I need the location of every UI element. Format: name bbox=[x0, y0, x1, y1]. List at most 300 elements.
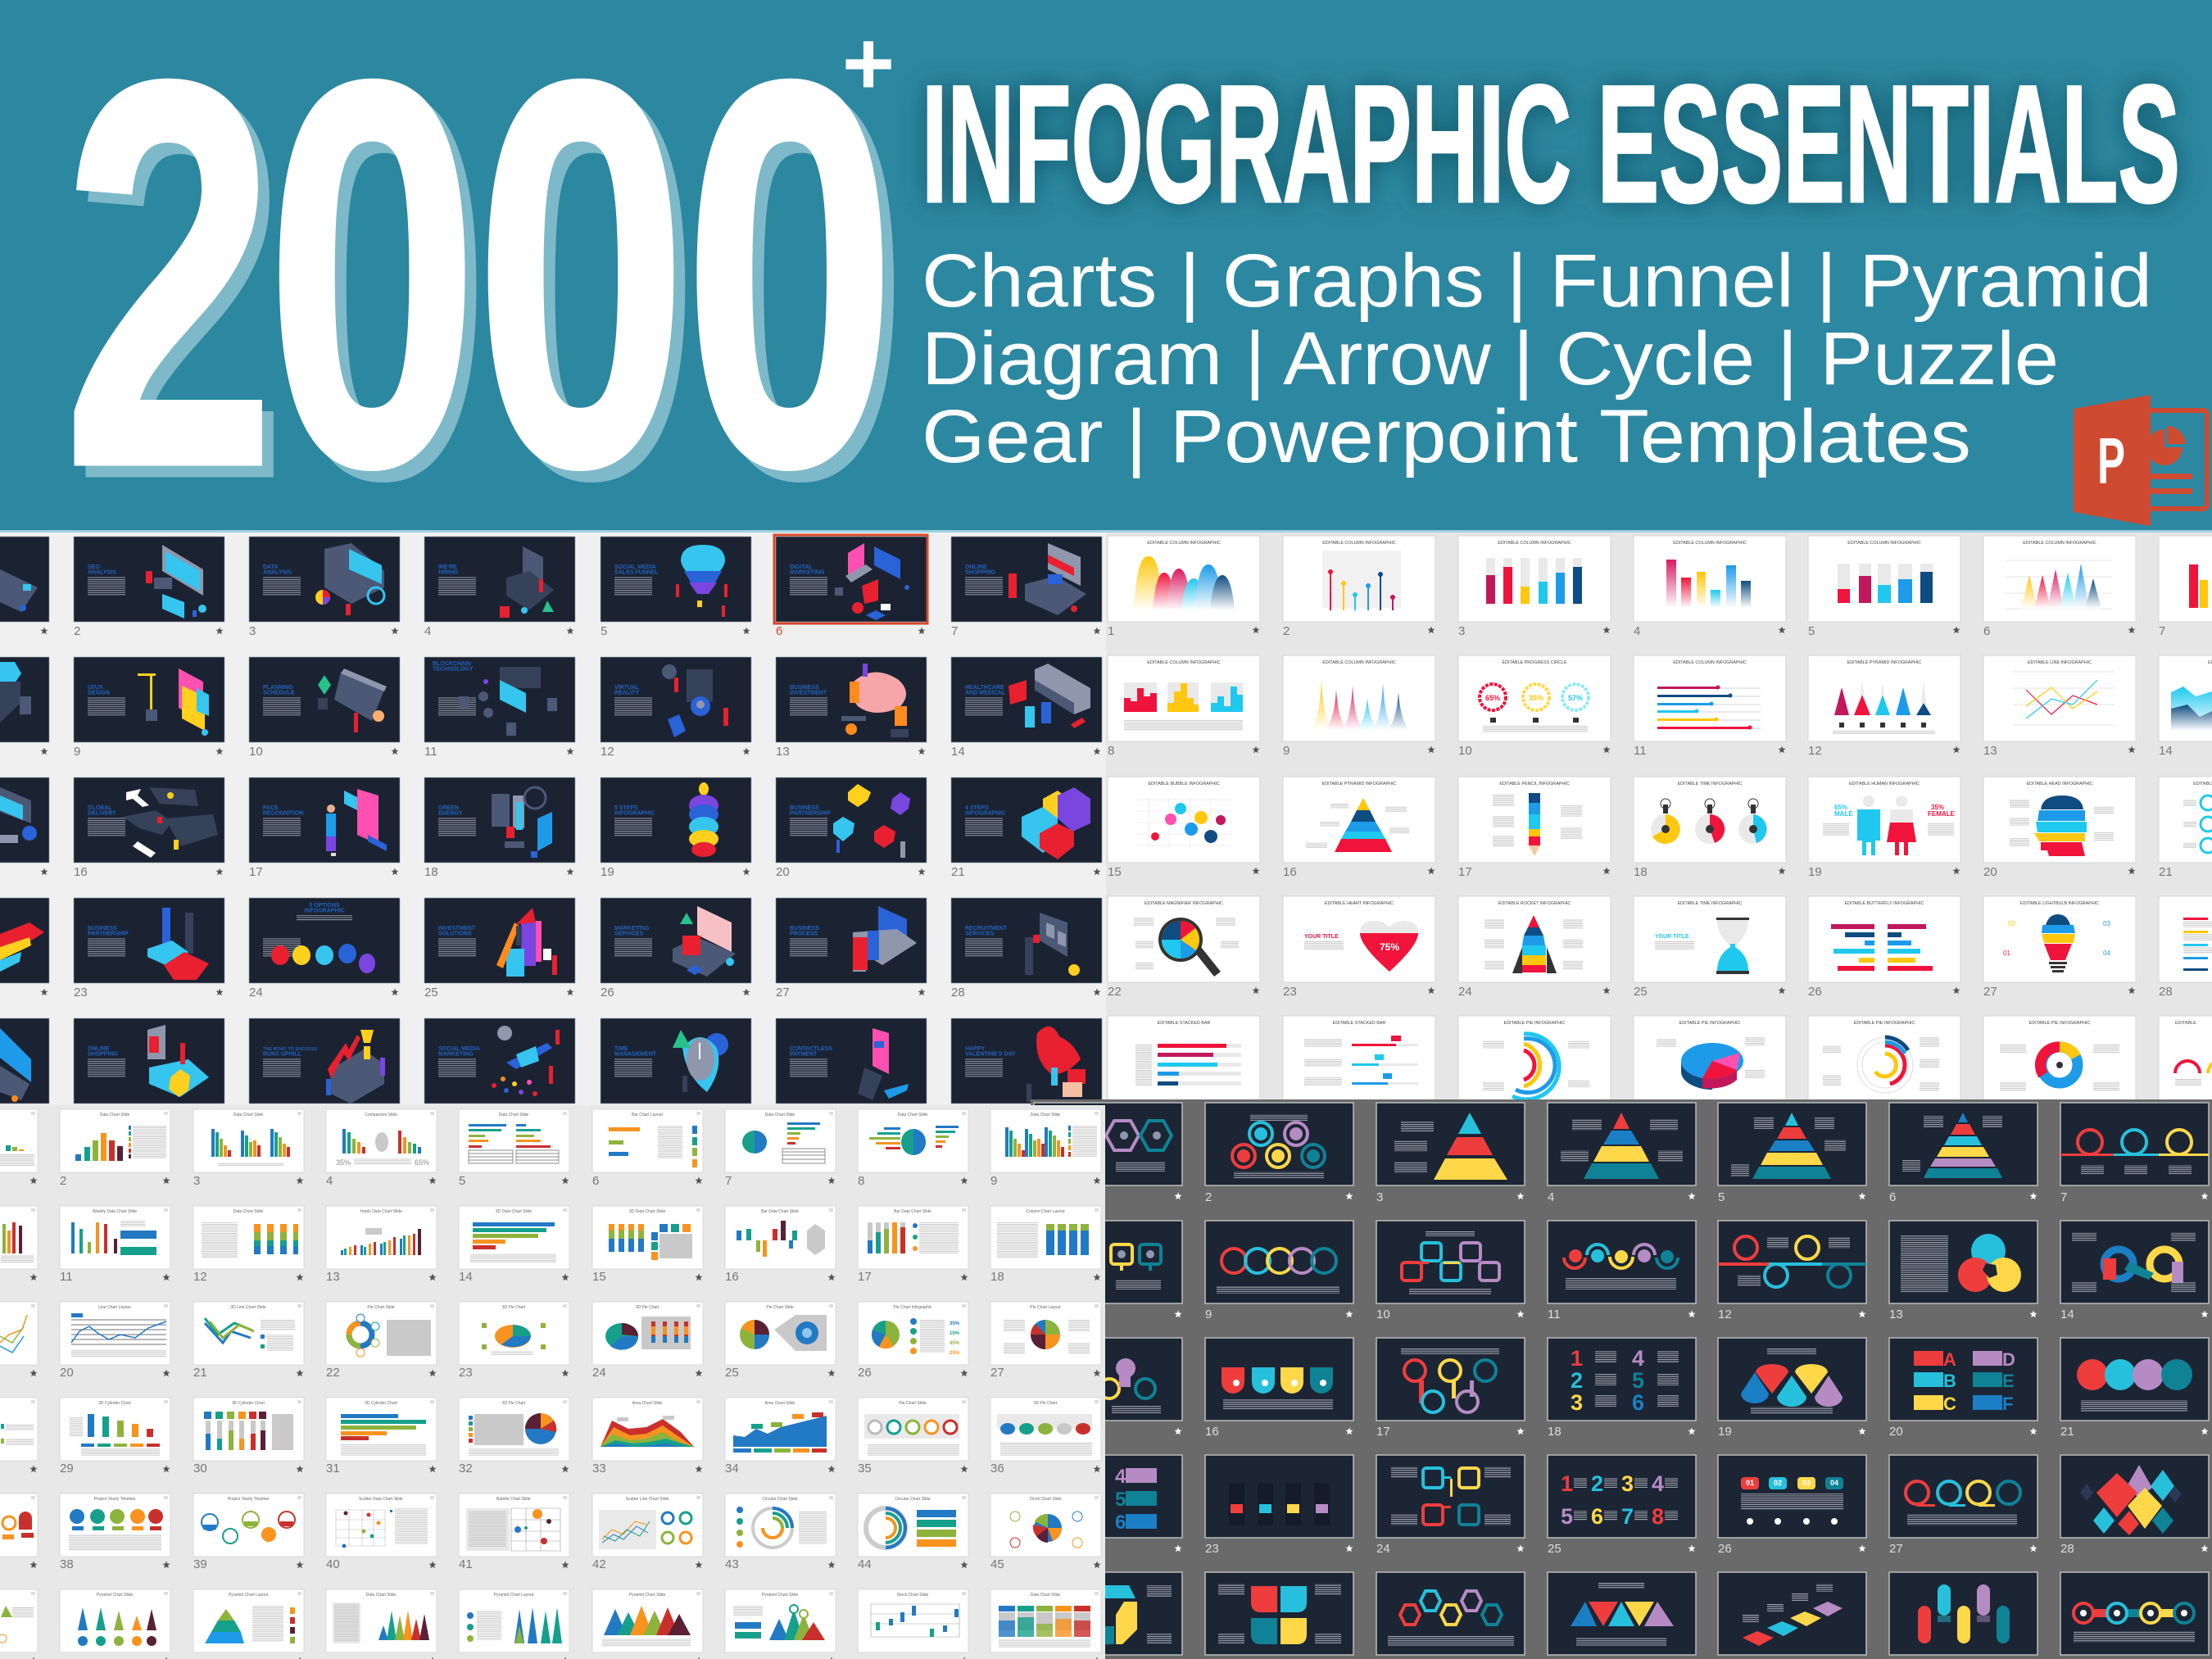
slide 20: lettered blocks: B bbox=[1943, 1371, 1956, 1391]
slide 9: data chart: Data Chart Slide bbox=[1031, 1113, 1061, 1117]
slide 5: bars and table bbox=[459, 1109, 569, 1184]
slide numbers for bottom left panel: 13 bbox=[326, 1270, 340, 1284]
slide 33: editable radial pie: EDITABLE PIE INFOGRAPHIC bbox=[1854, 1021, 1915, 1026]
slide 20: business partnership: BUSINESS bbox=[790, 805, 819, 811]
slide 29: 3d cylinder bbox=[60, 1398, 170, 1472]
slide 30: online shopping: ONLINE bbox=[88, 1046, 109, 1052]
slide numbers for bottom right panel: 17 bbox=[1376, 1425, 1390, 1439]
slide numbers for bottom right panel: 13 bbox=[1889, 1308, 1903, 1321]
slide numbers for bottom left panel: 8 bbox=[858, 1174, 864, 1188]
slide numbers for bottom left panel: 20 bbox=[60, 1366, 74, 1380]
header banner background bbox=[0, 0, 2212, 533]
slide 19: editable human bbox=[1808, 777, 1960, 874]
slide 1 cropped bbox=[0, 537, 49, 634]
slide 25: editable hourglass: YOUR TITLE bbox=[1655, 934, 1689, 940]
slide 26: pie infographic: Pie Chart Infographic bbox=[894, 1305, 932, 1310]
slide 27: editable lightbulb: 04 bbox=[2103, 950, 2110, 957]
slide numbers for top right panel: 11 bbox=[1634, 744, 1647, 758]
slide 31: 3d cylinder bars: 3D Cylinder Chart bbox=[365, 1401, 397, 1406]
slide numbers for top right panel: 23 bbox=[1283, 985, 1297, 999]
slide 40: scatter data bbox=[326, 1494, 437, 1568]
slide 33: time management bbox=[601, 1018, 751, 1116]
slide 19: editable human: 35% bbox=[1931, 804, 1944, 811]
slide 41: bubble chart bbox=[459, 1494, 569, 1568]
slide 32: social media marketing: MARKETING bbox=[438, 1052, 474, 1057]
slide numbers for bottom right panel: 2 bbox=[1205, 1190, 1212, 1204]
slide 28: recruitment services bbox=[951, 898, 1102, 995]
slide 29: editable stacked bars bbox=[1108, 1016, 1260, 1113]
slide 6: bar layout: Bar Chart Layout bbox=[632, 1113, 664, 1117]
slide 2: data chart bbox=[60, 1109, 170, 1184]
slide 28 cropped bbox=[0, 1398, 38, 1472]
slide 20: lettered blocks: D bbox=[2002, 1349, 2015, 1370]
slide 16: global delivery: DELIVERY bbox=[88, 811, 116, 816]
slide 27: business process bbox=[776, 898, 927, 995]
slide 25: pie slide bbox=[725, 1302, 836, 1376]
slide numbers for bottom left panel: 31 bbox=[326, 1462, 340, 1475]
slide 32: editable 3d pie: EDITABLE PIE INFOGRAPHIC bbox=[1679, 1021, 1740, 1026]
slide 32: table and 3d pie: 3D Pie Chart bbox=[502, 1401, 526, 1406]
slide 26: pie infographic bbox=[858, 1302, 968, 1376]
slide 35: happy valentine's day bbox=[951, 1018, 1102, 1116]
slide 23: 3d pie: 3D Pie Chart bbox=[502, 1305, 526, 1310]
slide 50: pyramid chart layout: Pyramid Chart Layout bbox=[494, 1593, 534, 1598]
slide 13: business investment bbox=[776, 657, 927, 755]
slide 13: venn diagram bbox=[1889, 1221, 2037, 1317]
slide numbers for bottom left panel: 45 bbox=[990, 1557, 1004, 1571]
slide numbers for bottom left panel: 34 bbox=[725, 1462, 739, 1475]
slide numbers for top right panel: 21 bbox=[2159, 865, 2173, 879]
slide 4: editable column gradient bars bbox=[1634, 536, 1786, 633]
slide 8: column small multiples: EDITABLE COLUMN INFOGRAPHIC bbox=[1147, 660, 1221, 665]
slide 9: UI/UX design bbox=[74, 657, 224, 755]
slide 49: data chart cones bbox=[326, 1589, 437, 1659]
slide numbers for bottom left panel: 12 bbox=[193, 1270, 207, 1284]
slide 25: investment solutions: SOLUTIONS bbox=[438, 931, 472, 937]
slide 42: scatter line chart bbox=[592, 1494, 703, 1568]
slide numbers for bottom right panel: 25 bbox=[1548, 1542, 1562, 1556]
slide numbers for bottom left panel: 22 bbox=[326, 1366, 340, 1380]
slide 10: progress circles bbox=[1458, 655, 1611, 753]
slide numbers for bottom left panel: 23 bbox=[459, 1366, 473, 1380]
slide 28 cropped bbox=[2159, 896, 2212, 994]
slide 4: we're hiring bbox=[424, 537, 575, 634]
slide 30: editable stacked bar callouts: EDITABLE STACKED BAR bbox=[1333, 1021, 1386, 1026]
slide 10: planning schedule: SCHEDULE bbox=[263, 690, 295, 696]
slide 28: diamond grid bbox=[2060, 1455, 2209, 1552]
slide numbers for top left panel: 25 bbox=[424, 986, 438, 999]
slide 11: slider bars: EDITABLE COLUMN INFOGRAPHIC bbox=[1673, 660, 1747, 665]
slide 11: weekly data: Weekly Data Chart Slide bbox=[93, 1209, 137, 1214]
slide numbers for bottom right panel: 11 bbox=[1548, 1308, 1561, 1321]
slide numbers for bottom left panel: 2 bbox=[60, 1174, 66, 1188]
slide 6: editable column peaks: EDITABLE COLUMN INFOGRAPHIC bbox=[2023, 541, 2096, 546]
slide 21: 4 steps infographic: 4 STEPS bbox=[965, 805, 989, 811]
slide 41: bubble chart: Bubble Chart Slide bbox=[496, 1497, 531, 1502]
slide 12: stacked columns bbox=[193, 1206, 304, 1281]
slide numbers for top right panel: 15 bbox=[1108, 865, 1122, 879]
slide numbers for bottom left panel: 41 bbox=[459, 1557, 473, 1571]
slide 4: pyramid four layers bbox=[1548, 1103, 1696, 1199]
slide 51: pyramid chart overlapping: Pyramid Chart Slide bbox=[629, 1593, 665, 1598]
slide 23: dark columns bbox=[1205, 1455, 1353, 1552]
slide 26: editable butterfly: EDITABLE BUTTERFLY INFOGRAPHIC bbox=[1844, 901, 1924, 906]
slide numbers for top left panel: 3 bbox=[249, 624, 256, 638]
slide 20: lettered blocks bbox=[1889, 1338, 2037, 1435]
slide 30: online shopping bbox=[74, 1018, 224, 1116]
slide numbers for bottom right panel: 10 bbox=[1376, 1308, 1390, 1321]
slide 28: recruitment services: RECRUITMENT bbox=[965, 926, 1007, 931]
slide 12: virtual reality: VIRTUAL bbox=[614, 685, 639, 691]
slide 1: editable column bumps: EDITABLE COLUMN INFOGRAPHIC bbox=[1147, 541, 1221, 546]
slide 23: editable heart: EDITABLE HEART INFOGRAPHIC bbox=[1325, 901, 1394, 906]
slide 26: pie infographic: 15% bbox=[950, 1331, 960, 1336]
slide numbers for bottom right panel: 5 bbox=[1718, 1190, 1725, 1204]
slide 24: 5 options infographic bbox=[249, 898, 400, 995]
slide numbers for top right panel: 28 bbox=[2159, 985, 2173, 999]
slide 34: contactless payment: PAYMENT bbox=[790, 1052, 818, 1057]
slide 17: face recognition: FACE bbox=[263, 805, 279, 811]
slide 9: data chart bbox=[990, 1109, 1101, 1184]
slide 27: editable lightbulb: EDITABLE LIGHTBULB INFOGRAPHIC bbox=[2020, 901, 2099, 906]
slide numbers for bottom right panel: 16 bbox=[1205, 1425, 1219, 1439]
slide 15: 3d data with table: 3D Data Chart Slide bbox=[629, 1209, 665, 1214]
slide 33: time management: MANAGEMENT bbox=[614, 1052, 657, 1057]
slide 4: comparison bbox=[326, 1109, 437, 1184]
slide numbers for bottom left panel: 16 bbox=[725, 1270, 739, 1284]
slide 25: pie slide: Pie Chart Slide bbox=[766, 1305, 794, 1310]
slide 22: pie chart icons: Pie Chart Slide bbox=[367, 1305, 395, 1310]
slide 18: numbered items: 5 bbox=[1632, 1368, 1644, 1393]
slide numbers for bottom left panel: 30 bbox=[193, 1462, 207, 1475]
slide 20: business partnership: PARTNERSHIP bbox=[790, 811, 831, 816]
slide 43: circular chart bbox=[725, 1494, 836, 1568]
slide 23: 3d pie bbox=[459, 1302, 569, 1376]
slide 2: editable column lollipop: EDITABLE COLUMN INFOGRAPHIC bbox=[1322, 541, 1396, 546]
slide 25: editable hourglass: EDITABLE TIME INFOGRAPHIC bbox=[1678, 901, 1743, 906]
slide numbers for bottom left panel: 4 bbox=[326, 1174, 333, 1188]
slide numbers for top left panel: 16 bbox=[74, 865, 88, 879]
slide 4: we're hiring: WE'RE bbox=[438, 564, 457, 570]
slide 13: editable line chart bbox=[1983, 655, 2136, 753]
slide 12: virtual reality: REALITY bbox=[614, 690, 639, 696]
slide 18: editable stopwatch: EDITABLE TIME INFOGRAPHIC bbox=[1678, 782, 1743, 786]
slide 14: healthcare and medical bbox=[951, 657, 1102, 755]
slide 10: progress circles: EDITABLE PROGRESS CIRCLE bbox=[1503, 660, 1567, 665]
icon: PowerPoint logo: P bbox=[2097, 424, 2125, 497]
slide numbers for top left panel: 7 bbox=[951, 624, 958, 638]
slide 18: numbered items bbox=[1548, 1338, 1696, 1435]
subtitle lines bbox=[922, 239, 2152, 478]
slide 18: editable stopwatch bbox=[1634, 777, 1786, 874]
slide 32: table and 3d pie bbox=[459, 1398, 569, 1472]
slide 21: 3d line chart bbox=[193, 1302, 304, 1376]
slide numbers for bottom right panel: 19 bbox=[1718, 1425, 1732, 1439]
slide 9: UI/UX design: DESIGN bbox=[88, 690, 110, 696]
slide 26: numbered tags: 04 bbox=[1830, 1479, 1838, 1487]
slide 4: we're hiring: HIRING bbox=[438, 570, 459, 575]
slide 39: project timeline rings bbox=[193, 1494, 304, 1568]
slide 6: digital marketing selected: DIGITAL bbox=[790, 564, 812, 570]
selected slide highlight bbox=[774, 535, 927, 623]
slide numbers for top left panel: 20 bbox=[776, 865, 790, 879]
slide numbers for top right panel: 6 bbox=[1983, 624, 1990, 638]
slide 16: bar data: Bar Data Chart Slide bbox=[761, 1209, 799, 1214]
slide 39: project timeline rings: Project Yearly Timeline bbox=[228, 1497, 270, 1502]
slide 29 cropped bbox=[1034, 1572, 1182, 1659]
slide 15 cropped bbox=[0, 777, 49, 875]
slide 3: data chart: Data Chart Slide bbox=[233, 1113, 264, 1117]
slide 35: chained rings bbox=[2060, 1572, 2209, 1659]
slide numbers for top left panel: 23 bbox=[74, 986, 88, 999]
slide numbers for top right panel bbox=[1108, 624, 2173, 999]
slide 22: editable magnifier: EDITABLE MAGNIFIER INFOGRAPHIC bbox=[1145, 901, 1223, 906]
slide 34: contactless payment: CONTACTLESS bbox=[790, 1046, 832, 1052]
slide 20: lettered blocks: F bbox=[2002, 1394, 2013, 1414]
slide 24: 3d pie and columns: 3D Pie Chart bbox=[636, 1305, 660, 1310]
panel: white column chart slide sorter, top right bbox=[1106, 533, 2212, 1099]
slide 2: SEO analysis: SEO bbox=[88, 564, 100, 570]
slide 53: stock chart bbox=[858, 1589, 968, 1659]
slide 24: 3d pie and columns bbox=[592, 1302, 703, 1376]
slide 36: 3d pies: 3D Pie Chart bbox=[1034, 1401, 1058, 1406]
slide numbers for top left panel: 19 bbox=[601, 865, 614, 879]
slide 13: business investment: BUSINESS bbox=[790, 685, 819, 691]
slide 24: 5 options infographic: INFOGRAPHIC bbox=[305, 908, 344, 914]
slide 7: online shopping bbox=[951, 537, 1102, 634]
slide 19: 5 steps infographic: INFOGRAPHIC bbox=[614, 811, 655, 816]
slide numbers for bottom right panel: 23 bbox=[1205, 1542, 1219, 1556]
slide 11: wave of circles bbox=[1548, 1221, 1696, 1317]
slide 16: global delivery bbox=[74, 777, 224, 875]
slide 11: blockchain technology bbox=[424, 657, 575, 755]
slide numbers for bottom left panel: 39 bbox=[193, 1557, 207, 1571]
slide 19 cropped bbox=[0, 1302, 38, 1376]
slide numbers for bottom right panel: 24 bbox=[1376, 1542, 1390, 1556]
slide 43: circular chart: Circular Chart Slide bbox=[762, 1497, 798, 1502]
slide 5: editable column 3d: EDITABLE COLUMN INFOGRAPHIC bbox=[1847, 541, 1921, 546]
slide numbers for top right panel: 12 bbox=[1808, 744, 1822, 758]
slide numbers for top right panel: 3 bbox=[1458, 624, 1465, 638]
slide numbers for top left panel: 9 bbox=[74, 745, 80, 759]
slide 16: editable pyramid bbox=[1283, 777, 1435, 874]
slide 4: editable column gradient bars: EDITABLE COLUMN INFOGRAPHIC bbox=[1673, 541, 1747, 546]
panel: dark isometric slide sorter, top left bbox=[0, 533, 1106, 1105]
slide 36: 3d pies bbox=[990, 1398, 1101, 1472]
slide 22 cropped: 6 bbox=[1115, 1512, 1126, 1534]
slide 52: pyramid chart pins bbox=[725, 1589, 836, 1659]
slide 16: bar data bbox=[725, 1206, 836, 1281]
slide 35: happy valentine's day: HAPPY bbox=[965, 1046, 985, 1052]
slide numbers for bottom left panel: 9 bbox=[990, 1174, 997, 1188]
slide 3: data analysis: ANALYSIS bbox=[263, 570, 292, 575]
slide 48: pyramid layout bbox=[193, 1589, 304, 1659]
slide numbers for top right panel: 4 bbox=[1634, 624, 1640, 638]
slide numbers for bottom left panel: 18 bbox=[990, 1270, 1004, 1284]
slide numbers for top right panel: 25 bbox=[1634, 985, 1648, 999]
slide numbers for top right panel: 5 bbox=[1808, 624, 1815, 638]
slide 31: the road to success runs uphill: RUNS UPHILL bbox=[263, 1052, 302, 1057]
slide numbers for bottom left panel: 38 bbox=[60, 1557, 74, 1571]
slide numbers for top left panel bbox=[74, 624, 965, 999]
slide 15: editable bubble bbox=[1108, 777, 1260, 874]
slide 25: numbered one to eight bbox=[1548, 1455, 1696, 1552]
slide numbers for top right panel: 13 bbox=[1983, 744, 1997, 758]
slide numbers for bottom left panel: 27 bbox=[990, 1366, 1004, 1380]
panel: light data chart slide sorter, bottom left bbox=[0, 1105, 1105, 1659]
slide numbers for bottom right panel: 14 bbox=[2060, 1308, 2074, 1321]
slide 21: four circles bbox=[2060, 1338, 2209, 1435]
subtitle lines: Diagram | Arrow | Cycle | Puzzle bbox=[922, 317, 2059, 401]
slide 5: social media sales funnel bbox=[601, 537, 751, 634]
slide 19: editable human: MALE bbox=[1834, 810, 1853, 818]
subtitle lines: Gear | Powerpoint Templates bbox=[922, 395, 1971, 478]
slide numbers for top left panel: 2 bbox=[74, 624, 80, 638]
slide 1: editable column bumps bbox=[1108, 536, 1260, 633]
slide 15: editable bubble: EDITABLE BUBBLE INFOGRAPHIC bbox=[1148, 782, 1220, 786]
slide 27: pie layout bbox=[990, 1302, 1101, 1376]
slide 27: open rings bbox=[1889, 1455, 2037, 1552]
slide 2: data chart: Data Chart Slide bbox=[100, 1113, 130, 1117]
slide 18: column layout bbox=[990, 1206, 1101, 1281]
slide 5: social media sales funnel: SOCIAL MEDIA bbox=[614, 564, 656, 570]
slide numbers for top right panel: 18 bbox=[1634, 865, 1648, 879]
slide 3: pyramid three layers bbox=[1376, 1103, 1525, 1199]
slide numbers for top right panel: 8 bbox=[1108, 744, 1114, 758]
slide 53: stock chart: Stock Chart Slide bbox=[897, 1593, 929, 1598]
slide 18: green energy: ENERGY bbox=[438, 811, 463, 816]
slide 22: editable magnifier bbox=[1108, 896, 1260, 994]
slide 6: digital marketing selected: MARKETING bbox=[790, 570, 825, 575]
slide numbers for bottom left panel: 33 bbox=[592, 1462, 606, 1475]
slide numbers for top right panel: 20 bbox=[1983, 865, 1997, 879]
slide numbers for bottom right panel: 20 bbox=[1889, 1425, 1903, 1439]
slide 11: slider bars bbox=[1634, 655, 1786, 753]
slide 23: editable heart: YOUR TITLE bbox=[1304, 934, 1339, 940]
slide 30: online shopping: SHOPPING bbox=[88, 1052, 119, 1057]
slide 33: rising platforms bbox=[1718, 1572, 1866, 1659]
slide 26: numbered tags: 03 bbox=[1802, 1479, 1811, 1487]
slide 10 cropped bbox=[0, 1206, 38, 1281]
slide numbers for top right panel: 16 bbox=[1283, 865, 1297, 879]
slide 5: social media sales funnel: SALES FUNNEL bbox=[614, 570, 659, 575]
slide 14: healthcare and medical: AND MEDICAL bbox=[965, 690, 1006, 696]
slide 15 cropped bbox=[1034, 1338, 1182, 1435]
slide 31: 3d cylinder bars bbox=[326, 1398, 437, 1472]
slide 30: 3d cylinder boxes: 3D Cylinder Chart bbox=[232, 1401, 265, 1406]
slide 8: column small multiples bbox=[1108, 655, 1260, 753]
slide numbers for bottom right panel: 4 bbox=[1548, 1190, 1554, 1204]
slide 23: editable heart: 75% bbox=[1380, 941, 1399, 953]
slide 20: lettered blocks: E bbox=[2002, 1371, 2015, 1391]
slide 25: editable hourglass bbox=[1634, 896, 1786, 994]
slide numbers for top left panel: 21 bbox=[951, 865, 965, 879]
slide numbers for top right panel: 19 bbox=[1808, 865, 1822, 879]
slide 33: area chart: Area Chart Slide bbox=[632, 1401, 663, 1406]
slide 19: editable human: 65% bbox=[1834, 804, 1847, 811]
slide 12: editable pyramid cones bbox=[1808, 655, 1960, 753]
slide 14 cropped bbox=[2159, 655, 2212, 753]
slide numbers for bottom left panel: 32 bbox=[459, 1462, 473, 1475]
slide numbers for top right panel: 10 bbox=[1458, 744, 1472, 758]
slide 1 cropped bbox=[0, 1109, 38, 1184]
slide 32: triangles row bbox=[1548, 1572, 1696, 1659]
slide 44: circular chart with boxes bbox=[858, 1494, 968, 1568]
slide 26: marketing services: SERVICES bbox=[614, 931, 644, 937]
slide 17: editable pencil bbox=[1458, 777, 1611, 874]
slide numbers for top right panel: 17 bbox=[1458, 865, 1472, 879]
slide 14: 3d bars bbox=[459, 1206, 569, 1281]
slide 26: pie infographic: 35% bbox=[950, 1321, 960, 1326]
slide 38: project yearly timeline bbox=[60, 1494, 170, 1568]
slide 31: the road to success runs uphill bbox=[249, 1018, 400, 1116]
slide 30: four petals bbox=[1205, 1572, 1353, 1659]
slide numbers for bottom right panel: 3 bbox=[1376, 1190, 1383, 1204]
slide 9: UI/UX design: UI/UX bbox=[88, 685, 103, 691]
slide 21: 4 steps infographic: INFOGRAPHIC bbox=[965, 811, 1005, 816]
slide 33: time management: TIME bbox=[614, 1046, 628, 1052]
slide 16: editable pyramid: EDITABLE PYRAMID INFOGRAPHIC bbox=[1322, 782, 1396, 786]
slide 16: global delivery: GLOBAL bbox=[88, 805, 112, 811]
slide 11: blockchain technology: TECHNOLOGY bbox=[433, 667, 474, 672]
slide 49: data chart cones: Data Chart Slide bbox=[366, 1593, 397, 1598]
slide 22: pie chart icons bbox=[326, 1302, 437, 1376]
slide 18: green energy bbox=[424, 777, 575, 875]
slide numbers for bottom right panel: 12 bbox=[1718, 1308, 1732, 1321]
slide 35: pie rings bbox=[858, 1398, 968, 1472]
slide 10: progress circles: 57% bbox=[1568, 694, 1583, 702]
slide 26: numbered tags: 01 bbox=[1746, 1479, 1754, 1487]
slide 14: 3d bars: 3D Data Chart Slide bbox=[496, 1209, 532, 1214]
slide numbers for top left panel: 24 bbox=[249, 986, 263, 999]
slide 1 cropped bbox=[1034, 1103, 1182, 1199]
slide 19: 5 steps infographic: 5 STEPS bbox=[614, 805, 638, 811]
slide 38: project yearly timeline: Project Yearly Timeline bbox=[94, 1497, 136, 1502]
slide 35 cropped: EDITABLE bbox=[2175, 1021, 2196, 1026]
slide 5: editable column 3d bbox=[1808, 536, 1960, 633]
slide 18: numbered items: 6 bbox=[1632, 1390, 1644, 1415]
slide 47: pyramid chart bbox=[60, 1589, 170, 1659]
slide 34: contactless payment bbox=[776, 1018, 927, 1116]
slide 4: comparison: 35% bbox=[336, 1158, 351, 1167]
slide numbers for bottom right panel: 7 bbox=[2060, 1190, 2067, 1204]
slide numbers for bottom right panel bbox=[1205, 1190, 2074, 1556]
slide numbers for bottom right panel: 6 bbox=[1889, 1190, 1896, 1204]
slide numbers for top left panel: 28 bbox=[951, 986, 965, 999]
slide 18: column layout: Column Chart Layout bbox=[1026, 1209, 1065, 1214]
slide 21: 4 steps infographic bbox=[951, 777, 1102, 875]
slide 25: numbered one to eight: 1 bbox=[1561, 1471, 1573, 1496]
plus sign: + bbox=[842, 13, 895, 114]
slide 26: marketing services: MARKETING bbox=[614, 926, 649, 931]
slide numbers for top left panel: 17 bbox=[249, 865, 263, 879]
slide 50: pyramid chart layout bbox=[459, 1589, 569, 1659]
slide 18: numbered items: 4 bbox=[1632, 1346, 1644, 1371]
slide 54: data chart table bbox=[990, 1589, 1101, 1659]
slide 7 cropped bbox=[2159, 536, 2212, 633]
slide 20: lettered blocks: C bbox=[1943, 1394, 1956, 1414]
slide numbers for bottom left panel bbox=[60, 1174, 1004, 1571]
slide numbers for top left panel: 10 bbox=[249, 745, 263, 759]
slide 26: pie infographic: 45% bbox=[950, 1341, 960, 1346]
slide 16: curled banners bbox=[1205, 1338, 1353, 1435]
slide 4: comparison: Comparison Slide bbox=[365, 1113, 397, 1117]
slide 34: vertical pills bbox=[1889, 1572, 2037, 1659]
slide numbers for bottom left panel: 21 bbox=[193, 1366, 207, 1380]
slide 21: 3d line chart: 3D Line Chart Slide bbox=[230, 1305, 266, 1310]
slide numbers for top left panel: 18 bbox=[424, 865, 438, 879]
slide 25: numbered one to eight: 8 bbox=[1652, 1504, 1664, 1529]
